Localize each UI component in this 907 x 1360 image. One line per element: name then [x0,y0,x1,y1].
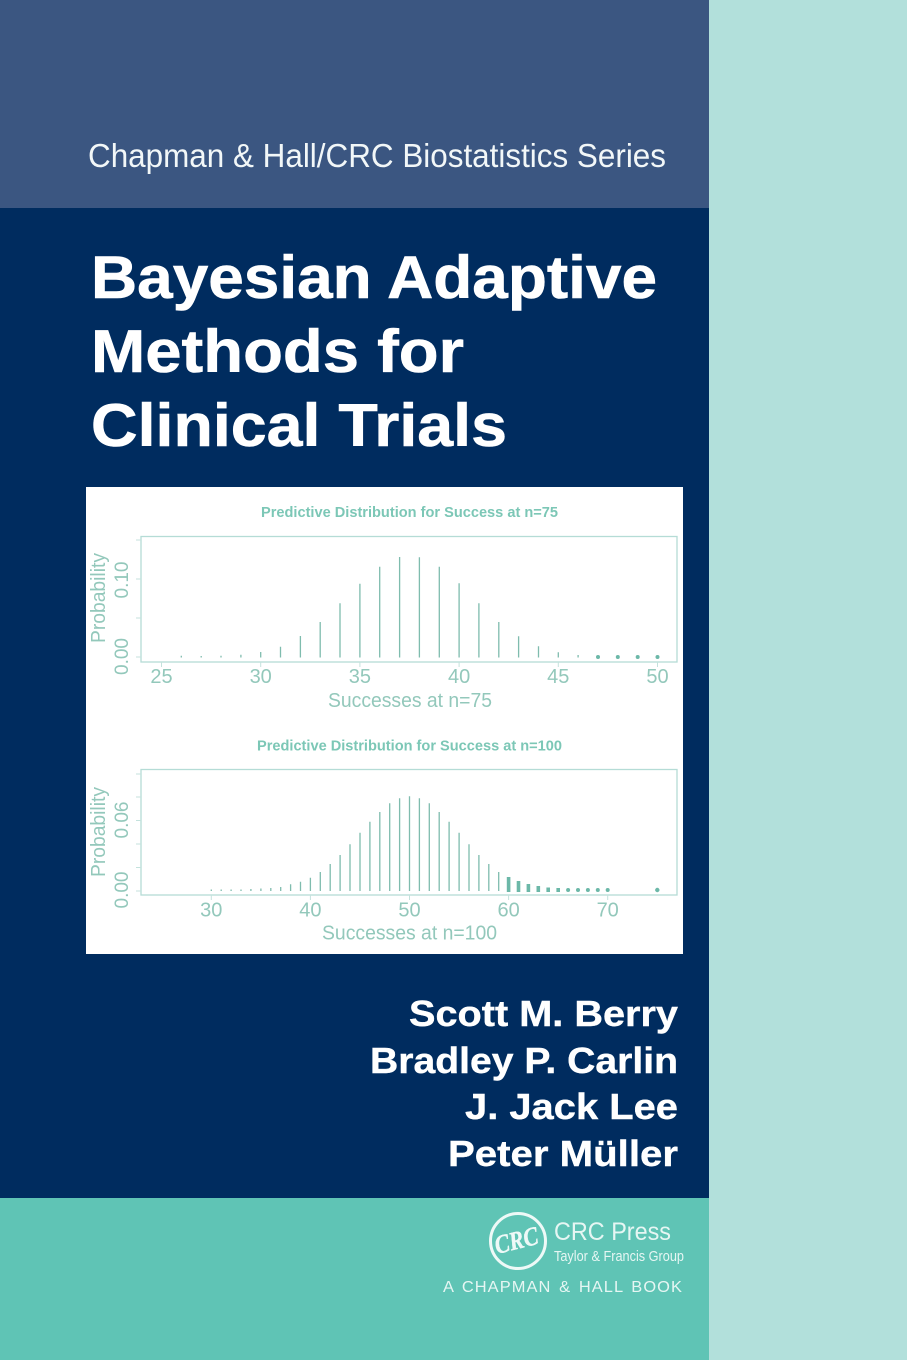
axis ticks n=100 [136,774,608,900]
panel: chart card [86,487,683,954]
chart: predictive distribution n=75 [88,505,677,712]
chart title n=75: Predictive Distribution for Success at n=75 [261,505,558,521]
series name: Chapman & Hall/CRC Biostatistics Series [88,137,666,174]
plot frame n=100 [141,770,677,895]
x axis numbers n=100: 70 [597,900,619,922]
publisher name: CRC Press [554,1218,671,1246]
probability bars n=75 [181,557,578,658]
panel: publisher band [0,1198,709,1360]
y axis numbers n=100 [112,802,133,908]
x axis numbers n=75 [150,666,669,688]
title: Methods for [91,318,464,385]
title [91,244,657,459]
publisher group: Taylor & Francis Group [554,1249,684,1265]
x axis numbers n=100: 60 [497,900,520,922]
y axis numbers n=100: 0.00 [112,872,133,908]
x axis numbers n=100: 50 [398,900,421,922]
plot frame n=75 [141,536,677,662]
imprint line: A CHAPMAN & HALL BOOK [443,1279,683,1296]
x axis numbers n=75: 25 [150,666,173,688]
authors: J. Jack Lee [465,1086,678,1127]
authors: Peter Müller [448,1133,678,1174]
authors [370,993,678,1174]
x axis numbers n=75: 30 [250,666,272,688]
panel: pale right strip [709,0,907,1360]
authors: Scott M. Berry [409,993,678,1034]
y axis label n=100: Probability [88,787,110,877]
title: Clinical Trials [91,392,507,459]
y axis numbers n=75 [112,562,133,675]
y axis numbers n=100: 0.06 [112,802,133,838]
x axis numbers n=75: 35 [349,666,371,688]
x axis label n=75: Successes at n=75 [328,690,492,712]
panel: series band [0,0,709,208]
x axis numbers n=100: 40 [299,900,322,922]
title: Bayesian Adaptive [91,244,657,311]
axis ticks n=75 [136,540,658,667]
authors: Bradley P. Carlin [370,1040,678,1081]
probability bars n=100 [211,796,499,891]
x axis label n=100: Successes at n=100 [322,922,497,944]
x axis numbers n=75: 45 [547,666,569,688]
icon: CRC logo: CRC [491,1221,542,1260]
thick tail bars n=100 [509,877,558,892]
x axis numbers n=100 [200,900,619,922]
x axis numbers n=75: 40 [448,666,470,688]
y axis numbers n=75: 0.00 [112,638,133,675]
y axis numbers n=75: 0.10 [112,562,133,598]
tail points n=100 [566,888,660,892]
chart: predictive distribution n=100 [88,738,677,944]
x axis numbers n=75: 50 [646,666,669,688]
tail points n=75 [596,655,660,659]
chart title n=100: Predictive Distribution for Success at n=100 [257,738,562,754]
x axis numbers n=100: 30 [200,900,222,922]
y axis label n=75: Probability [88,553,110,643]
icon: CRC logo [490,1214,546,1268]
panel: navy main background [0,208,709,1198]
